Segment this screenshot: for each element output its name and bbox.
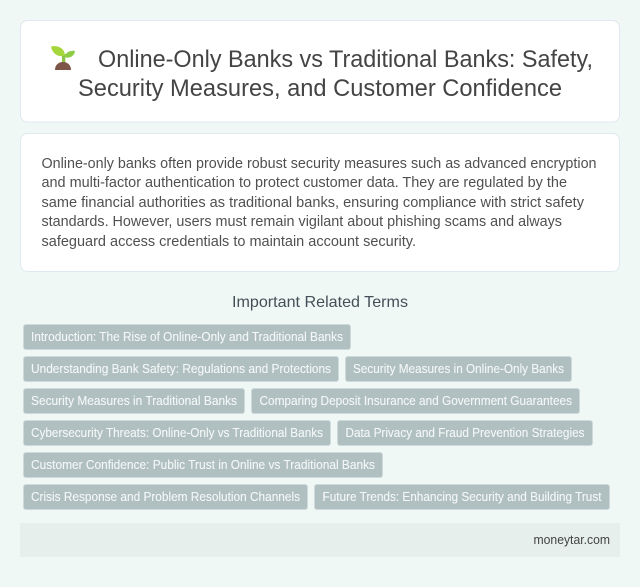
text block: description: standards. However, users must remain vigilant about phishing scams and always <box>42 214 562 230</box>
tag: customer confidence: Customer Confidence: Public Trust in Online vs Traditional Banks <box>31 458 375 472</box>
tag: crisis response <box>24 484 308 510</box>
heading: related terms: Important Related Terms <box>232 294 408 311</box>
tag: data privacy: Data Privacy and Fraud Prevention Strategies <box>346 426 584 440</box>
icon: seedling <box>51 46 75 70</box>
panel: header <box>20 20 620 122</box>
tag: online-only security <box>346 356 572 382</box>
tag: data privacy <box>338 420 592 446</box>
text block: description: and multi-factor authentication to protect customer data. They are regulated by the <box>42 175 567 191</box>
title: Online-Only Banks vs Traditional Banks: Safety, <box>98 46 593 73</box>
tag: deposit insurance: Comparing Deposit Insurance and Government Guarantees <box>260 394 572 408</box>
tag: customer confidence <box>24 452 382 478</box>
title <box>78 46 593 102</box>
tag: bank safety: Understanding Bank Safety: Regulations and Protections <box>31 362 331 376</box>
text block: description: safeguard access credentials to maintain account security. <box>42 234 416 250</box>
tag: future trends: Future Trends: Enhancing Security and Building Trust <box>322 490 602 504</box>
panel: intro text <box>20 134 620 272</box>
tag: cybersecurity <box>24 420 330 446</box>
tag: future trends <box>314 484 610 510</box>
tag list <box>24 324 610 510</box>
title: Security Measures, and Customer Confidence <box>78 75 562 102</box>
text block: description <box>42 156 596 250</box>
footer <box>20 523 620 557</box>
text block: description: Online-only banks often provide robust security measures such as advanced encryption <box>42 156 596 172</box>
tag: introduction <box>24 324 350 350</box>
tag: bank safety <box>24 356 338 382</box>
tag: online-only security: Security Measures in Online-Only Banks <box>353 362 564 376</box>
tag: cybersecurity: Cybersecurity Threats: Online-Only vs Traditional Banks <box>31 426 323 440</box>
tag: crisis response: Crisis Response and Problem Resolution Channels <box>31 490 300 504</box>
tag: traditional security: Security Measures in Traditional Banks <box>31 394 237 408</box>
tag: deposit insurance <box>252 388 580 414</box>
tag: traditional security <box>24 388 244 414</box>
footer source text: moneytar.com <box>534 532 610 547</box>
text block: description: same financial authorities as traditional banks, ensuring compliance with strict safety <box>42 195 585 211</box>
tag: introduction: Introduction: The Rise of Online-Only and Traditional Banks <box>31 330 343 344</box>
